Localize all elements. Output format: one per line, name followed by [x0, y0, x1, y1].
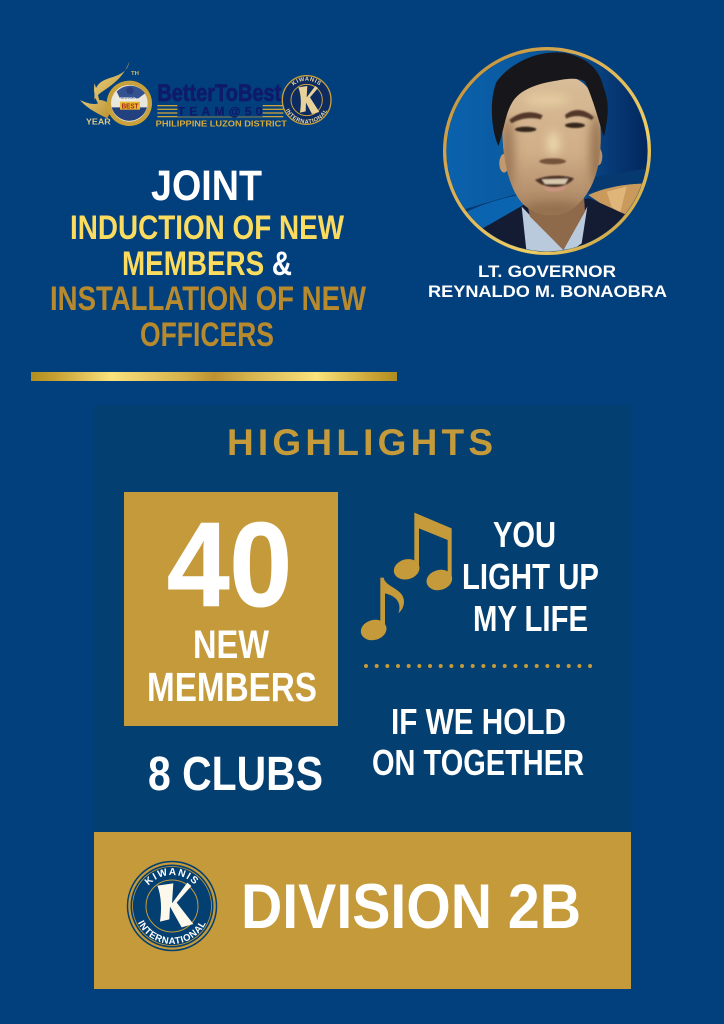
- stat card: 40 new members: 40: [167, 498, 292, 632]
- shirt: [522, 207, 587, 257]
- title line: Officers: OFFICERS: [140, 316, 274, 354]
- jacket: [483, 198, 625, 252]
- K mark: [157, 883, 193, 927]
- icon: Kiwanis International seal: KIWANIS: [144, 868, 198, 886]
- title line: Installation of new: INSTALLATION OF NEW: [50, 280, 367, 318]
- stat card: 40 new members: [124, 492, 338, 726]
- face: [502, 76, 601, 215]
- song title: If We Hold On Together: [372, 701, 584, 783]
- song title: If We Hold On Together: ON TOGETHER: [372, 742, 584, 783]
- heading: highlights: HIGHLIGHTS: [227, 422, 493, 463]
- icon: small Kiwanis seal: INTERNATIONAL: [286, 108, 328, 124]
- ears: [499, 154, 507, 173]
- panel background: [94, 405, 631, 833]
- icon: 50th year emblem: BEST: [122, 101, 139, 110]
- icon: 50th year emblem: [80, 62, 152, 126]
- hair: [492, 52, 608, 146]
- panel: highlights: [94, 405, 631, 833]
- stat card: 40 new members: NEW: [193, 623, 269, 667]
- icon: small Kiwanis seal: [282, 75, 332, 125]
- dotted divider: [366, 664, 591, 668]
- stat card: 40 new members: MEMBERS: [147, 664, 317, 710]
- logo wordmark: [156, 80, 287, 128]
- icon: 50th year emblem: TH: [131, 71, 139, 77]
- song title: You Light Up My Life: YOU: [493, 514, 556, 555]
- title line: JOINT: JOINT: [151, 162, 262, 210]
- caption line: name: REYNALDO M. BONAOBRA: [428, 282, 667, 301]
- title block: [50, 162, 367, 354]
- photo gold ring: [445, 49, 649, 253]
- song title: You Light Up My Life: MY LIFE: [473, 598, 588, 639]
- song title: You Light Up My Life: LIGHT UP: [462, 556, 599, 597]
- title line: Members &: MEMBERS &: [122, 245, 292, 283]
- icon: music notes: [359, 513, 454, 643]
- facial features: [509, 110, 594, 192]
- caption line: title: LT. GOVERNOR: [478, 262, 616, 281]
- icon: 50th year emblem: YEAR: [86, 117, 111, 126]
- icon: Kiwanis International seal: INTERNATIONAL: [138, 920, 206, 944]
- photo backdrop: [443, 47, 653, 257]
- icon: small Kiwanis seal: KIWANIS: [292, 76, 322, 86]
- neck: [528, 198, 585, 250]
- title line: Induction of new: INDUCTION OF NEW: [70, 209, 345, 247]
- gold divider bar: [31, 372, 397, 381]
- banner label: DIVISION 2B: [241, 872, 581, 942]
- banner: Division 2B: [94, 832, 631, 989]
- logo wordmark: TEAM@50: [178, 105, 263, 119]
- icon: Kiwanis International seal: [126, 860, 218, 952]
- face shading: [500, 95, 603, 218]
- logo wordmark: BetterToBest: [157, 80, 281, 107]
- logo strip: Better To Best Team@50: [80, 62, 332, 128]
- stat: 8 clubs: 8 CLUBS: [148, 748, 323, 801]
- caption: Lt. Governor name: [428, 262, 667, 301]
- K mark: [298, 86, 319, 114]
- portrait photo: [443, 47, 653, 257]
- banner background: [94, 832, 631, 989]
- song title: You Light Up My Life: [462, 514, 599, 639]
- song title: If We Hold On Together: IF WE HOLD: [391, 701, 566, 742]
- icon: 50th year emblem: BETTER: [116, 96, 136, 102]
- logo wordmark: PHILIPPINE LUZON DISTRICT: [156, 118, 287, 128]
